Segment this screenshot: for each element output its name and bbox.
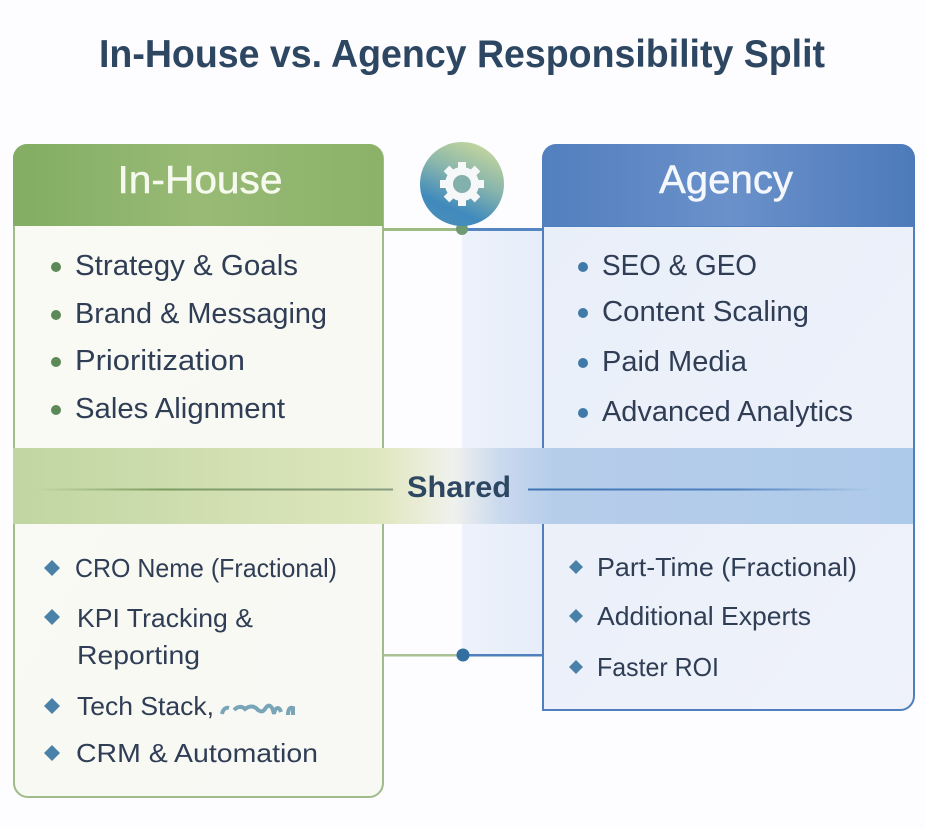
agency list: Content Scaling [602, 296, 809, 328]
agency shared list [569, 552, 857, 682]
bottom connector [383, 648, 542, 662]
middle blue connector area [462, 229, 543, 656]
in-house shared list: KPI Tracking & [77, 603, 253, 633]
agency list [578, 250, 853, 428]
in-house shared list: CRO Neme (Fractional) [75, 553, 337, 583]
in-house list: Prioritization [75, 345, 245, 377]
shared band [13, 448, 913, 524]
agency header [542, 144, 915, 226]
in-house list: Sales Alignment [75, 393, 285, 425]
in-house shared list: Tech Stack, [77, 691, 214, 721]
in-house list [51, 250, 327, 425]
agency shared list: Additional Experts [597, 601, 811, 631]
icon: garbled squiggle [222, 706, 293, 715]
agency list: Paid Media [602, 346, 748, 378]
in-house list: Strategy & Goals [75, 250, 298, 282]
agency list: Advanced Analytics [602, 396, 853, 428]
title: In-House vs. Agency Responsibility Split [99, 33, 825, 76]
in-house list: Brand & Messaging [75, 298, 327, 330]
in-house header [13, 144, 383, 226]
agency shared list: Part-Time (Fractional) [597, 552, 857, 582]
in-house shared list: Reporting [77, 640, 200, 670]
panel: in-house [13, 144, 383, 797]
shared band: Shared [407, 471, 511, 504]
agency shared list: Faster ROI [597, 652, 719, 682]
in-house shared list: CRM & Automation [76, 738, 318, 768]
agency list: SEO & GEO [602, 250, 757, 282]
panel: agency [542, 144, 915, 710]
icon: gear [420, 142, 504, 226]
top connector [383, 223, 542, 235]
in-house header: In-House [118, 159, 282, 202]
agency header: Agency [659, 158, 793, 202]
in-house shared list [44, 553, 337, 768]
